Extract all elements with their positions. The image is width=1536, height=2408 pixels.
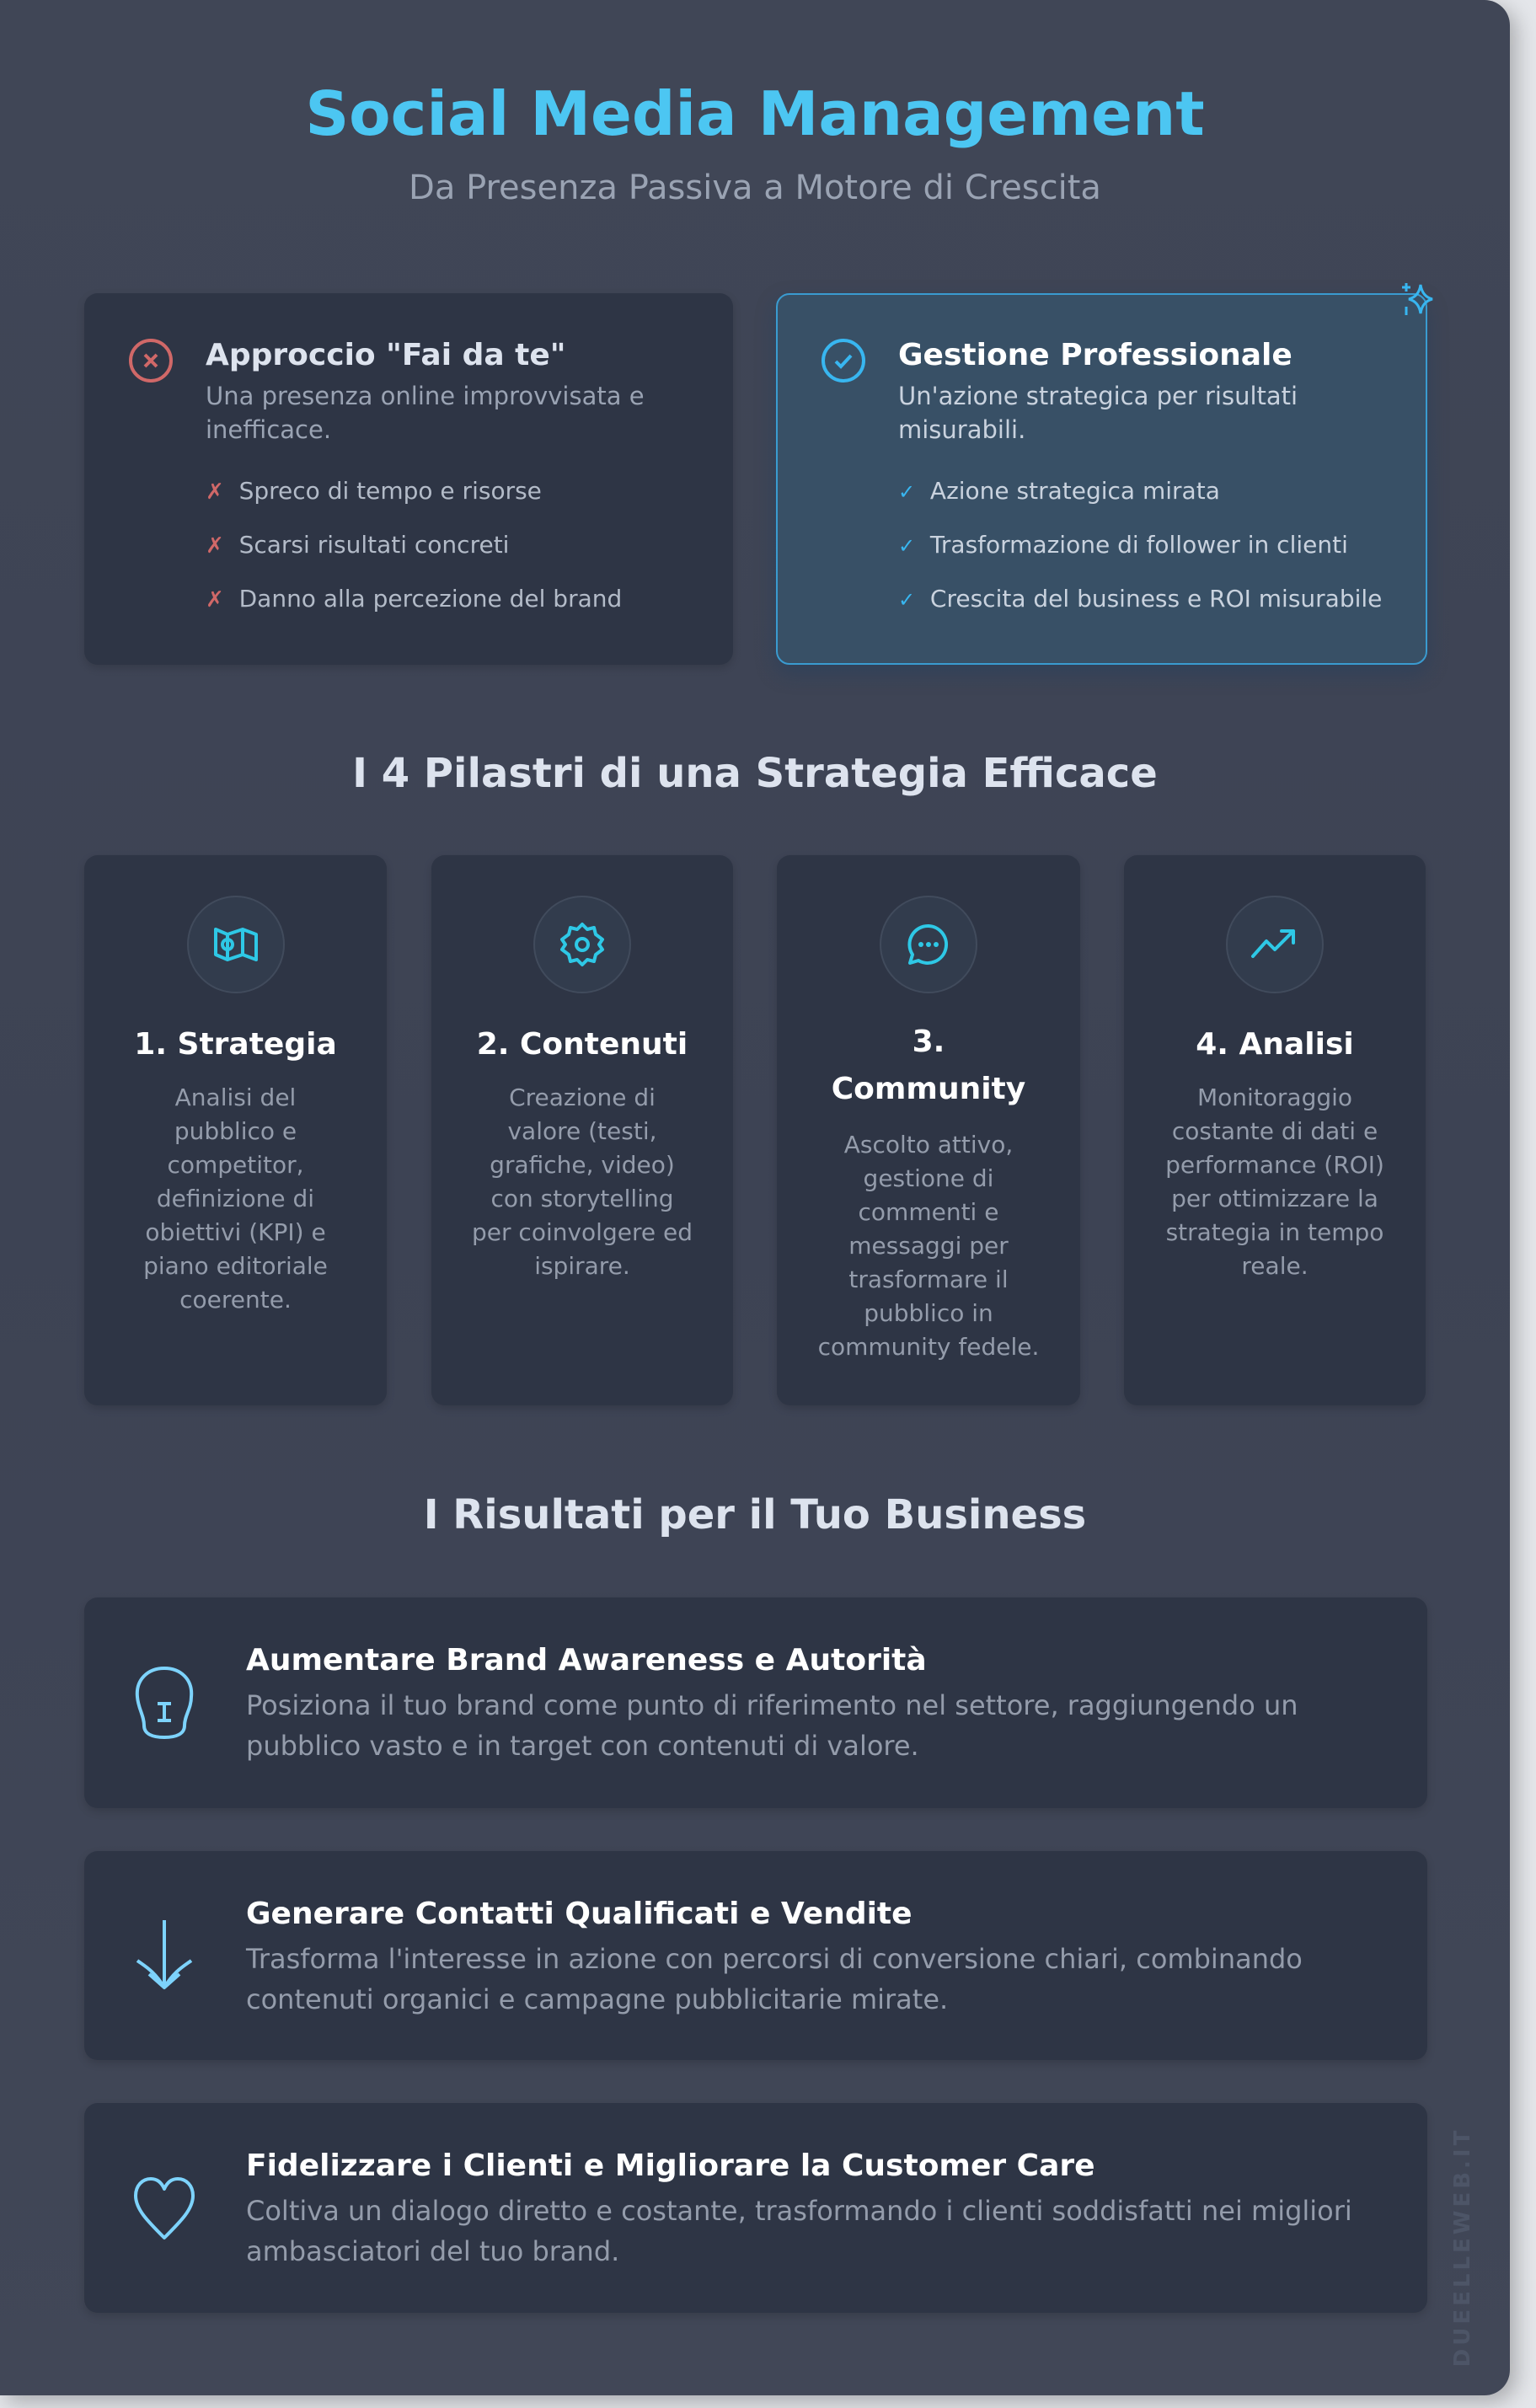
result: contatti: Trasforma l'interesse in azione con percorsi di conversione chiari, combinando contenuti organici e campagne pubblicitarie mirate.: [246, 1943, 1303, 2015]
icon: funnel arrow: [136, 1920, 192, 1990]
pillar: community: 3.: [913, 1025, 945, 1059]
icon: check circle: [822, 339, 865, 383]
pillar: community: Ascolto attivo, gestione di commenti e messaggi per trasformare il pubblico in community fedele.: [818, 1131, 1039, 1361]
icon: x circle: [129, 339, 173, 383]
icon: trending up: [1226, 896, 1324, 993]
watermark: DUEELLEWEB.IT: [1450, 2127, 1475, 2367]
pillar: community: [777, 855, 1080, 1405]
list: ✗ Spreco di tempo e risorse: [206, 477, 542, 505]
pillar: analisi: Monitoraggio costante di dati e performance (ROI) per ottimizzare la strategia in tempo reale.: [1165, 1084, 1384, 1280]
result: brand awareness: Posiziona il tuo brand come punto di riferimento nel settore, raggiungendo un pubblico vasto e in target con contenuti di valore.: [246, 1689, 1298, 1762]
list: ✓ Trasformazione di follower in clienti: [898, 531, 1348, 559]
title: Social Media Management: [305, 78, 1205, 149]
result: contatti: Generare Contatti Qualificati e Vendite: [246, 1897, 913, 1931]
result: fidelizzare: Fidelizzare i Clienti e Migliorare la Customer Care: [246, 2148, 1095, 2183]
heading: risultati: I Risultati per il Tuo Business: [424, 1491, 1086, 1538]
heading: Gestione Professionale: [898, 338, 1292, 372]
panel: gestione professionale: [776, 293, 1427, 665]
list: ✗ Scarsi risultati concreti: [206, 531, 509, 559]
heading: Approccio "Fai da te": [206, 338, 566, 372]
pillar: contenuti: 2. Contenuti: [477, 1027, 688, 1062]
list: ✗ Danno alla percezione del brand: [206, 585, 622, 613]
icon: heart: [134, 2177, 195, 2239]
result: fidelizzare: Coltiva un dialogo diretto e costante, trasformando i clienti soddisfatti nei migliori ambasciatori del tuo brand.: [246, 2195, 1352, 2267]
heading: pilastri: I 4 Pilastri di una Strategia Efficace: [352, 750, 1158, 797]
result: contatti: [84, 1851, 1427, 2060]
icon: gear: [533, 896, 631, 993]
pillar: contenuti: [431, 855, 733, 1405]
icon: lightbulb: [135, 1667, 194, 1739]
pillar: analisi: 4. Analisi: [1196, 1027, 1354, 1062]
subtitle: Da Presenza Passiva a Motore di Crescita: [409, 169, 1101, 207]
list: [206, 477, 622, 613]
pillar: strategia: [84, 855, 387, 1405]
description: Una presenza online improvvisata e inefficace.: [206, 382, 645, 444]
result: brand awareness: Aumentare Brand Awareness e Autorità: [246, 1643, 927, 1678]
pillar: strategia: Analisi del pubblico e competitor, definizione di obiettivi (KPI) e piano editoriale coerente.: [143, 1084, 328, 1314]
icon: map: [187, 896, 285, 993]
pillar: contenuti: Creazione di valore (testi, grafiche, video) con storytelling per coinvolgere ed ispirare.: [472, 1084, 693, 1280]
panel: fai da te: [84, 293, 733, 665]
pillar: strategia: 1. Strategia: [134, 1027, 337, 1062]
icon: sparkle: [1402, 283, 1432, 315]
result: brand awareness: [84, 1597, 1427, 1808]
result: fidelizzare: [84, 2103, 1427, 2313]
description: Un'azione strategica per risultati misurabili.: [898, 382, 1298, 444]
icon: chat bubble: [880, 896, 977, 993]
list: ✓ Azione strategica mirata: [898, 477, 1220, 505]
list: ✓ Crescita del business e ROI misurabile: [898, 585, 1382, 613]
pillar: analisi: [1124, 855, 1426, 1405]
pillar: community: Community: [832, 1072, 1025, 1106]
list: [898, 477, 1382, 613]
